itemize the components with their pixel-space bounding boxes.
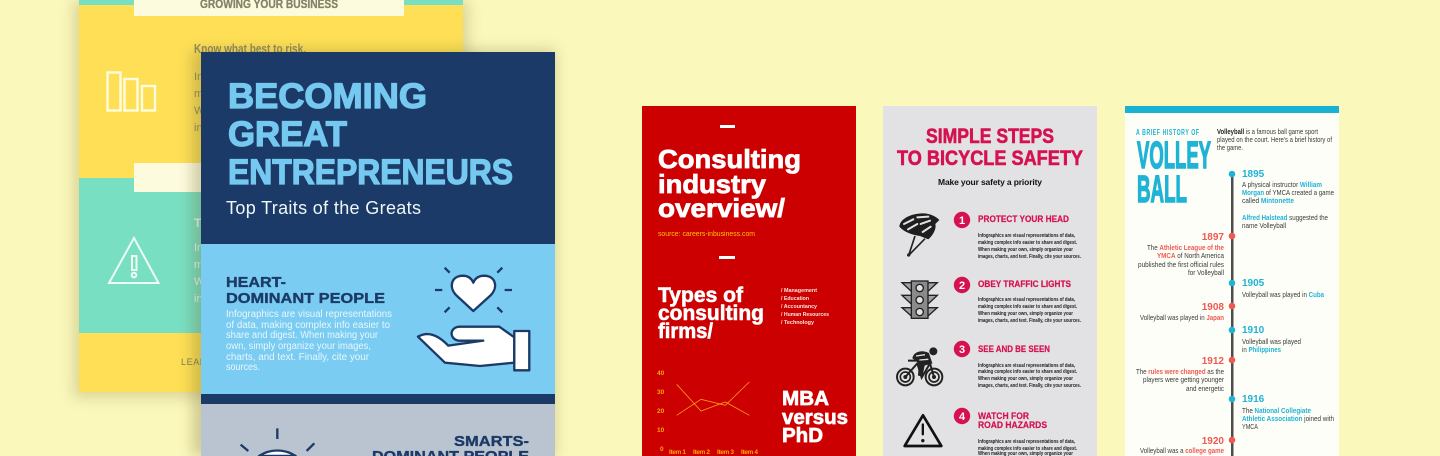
step text: Infographics are visual representations of data,: [978, 297, 1076, 303]
heading: mba versus phd: PhD: [782, 424, 823, 447]
text block: teal section: m: [194, 259, 203, 271]
step heading: ROAD HAZARDS: [978, 420, 1047, 431]
event 1905: 1905: [1242, 278, 1265, 289]
step text: images, charts, and text. Finally, cite your sources.: [978, 254, 1082, 260]
title: consulting industry overview: industry: [658, 169, 767, 199]
number badge 4: [954, 408, 970, 424]
step text: images, charts, and text. Finally, cite your sources.: [978, 383, 1082, 389]
title: simple steps to bicycle safety: SIMPLE STEPS: [926, 125, 1054, 148]
text block: risk section: [194, 41, 306, 134]
icon: warning triangle: [109, 238, 158, 283]
event 1910: Volleyball was played: [1242, 337, 1301, 346]
panel: becoming great entrepreneurs: [192, 50, 555, 456]
step heading: SEE AND BE SEEN: [978, 344, 1050, 355]
text block: introduction: the game.: [1217, 143, 1243, 152]
step text: [978, 439, 1078, 456]
step heading: [978, 411, 1047, 431]
list: firm types: [781, 288, 829, 326]
event 1916: The National Collegiate: [1242, 406, 1311, 415]
heading: heart-dominant people: [226, 274, 385, 307]
event 1910: [1229, 325, 1301, 354]
event 1912: The rules were changed as the: [1136, 367, 1224, 376]
event 1895: [1229, 169, 1334, 230]
text block: heart description: Infographics are visual representations: [226, 309, 392, 320]
section: smarts-dominant people: [201, 404, 555, 456]
icon: road hazard triangle: [905, 415, 941, 446]
event 1895: 1895: [1242, 169, 1265, 180]
title: a brief history of volleyball: BALL: [1137, 169, 1187, 211]
divider dash middle: [719, 256, 735, 259]
chart axis labels: [657, 370, 758, 456]
event 1916: Athletic Association joined with: [1242, 414, 1334, 423]
text block: risk section: Know what best to risk.: [194, 41, 306, 56]
event 1920: [1140, 436, 1235, 455]
event 1916: YMCA: [1242, 422, 1258, 431]
text block: risk section: in: [194, 122, 203, 134]
step text: When making your own, simply organize your: [978, 311, 1073, 317]
panel: yellow and teal business infographic: [73, 0, 469, 398]
event 1916: [1229, 394, 1334, 431]
text block: introduction: [1217, 127, 1333, 152]
source line: source: careers-inbusiness.com: [658, 229, 755, 238]
text block: teal section: [194, 216, 205, 305]
heading: heart-dominant people: DOMINANT PEOPLE: [226, 290, 385, 307]
step text: making complex info easier to share and digest.: [978, 369, 1078, 375]
number badge 3: [954, 341, 970, 357]
chart axis labels: 0: [660, 446, 664, 453]
step 3: [897, 341, 1082, 389]
event 1910: in Philippines: [1242, 345, 1281, 354]
chart axis labels: 10: [657, 427, 665, 434]
divider band: [201, 394, 555, 404]
step text: When making your own, simply organize your: [978, 247, 1073, 253]
event 1908: [1140, 302, 1235, 322]
text: learn more footer: LEAR: [181, 357, 207, 367]
event 1905: Volleyball was played in Cuba: [1242, 290, 1325, 299]
text block: introduction: Volleyball is a famous ball game sport: [1217, 127, 1319, 136]
title: [228, 77, 513, 192]
event 1895: A physical instructor William: [1242, 180, 1322, 189]
text block: heart description: own, simply organize your images,: [226, 341, 371, 352]
number badge 2: 2: [959, 280, 965, 292]
heading: types of consulting firms: [658, 284, 764, 343]
panel: volleyball history timeline: VOLLEY: [1137, 135, 1211, 177]
title: consulting industry overview: Consulting: [658, 144, 801, 174]
title: consulting industry overview: overview/: [658, 193, 785, 223]
step text: Infographics are visual representations of data,: [978, 439, 1076, 445]
step text: [978, 297, 1082, 324]
subtitle: Top Traits of the Greats: [226, 198, 421, 218]
chart axis labels: 30: [657, 389, 665, 396]
chart axis labels: 40: [657, 370, 665, 377]
text block: heart description: of data, making complex info easier to: [226, 320, 390, 331]
banner: growing your business: [134, 0, 404, 16]
chart axis labels: Item 3: [717, 449, 734, 456]
text block: heart description: [226, 309, 392, 373]
text block: heart description: sources.: [226, 362, 260, 373]
panel: volleyball history timeline: [1125, 106, 1339, 456]
heading: mba versus phd: versus: [782, 406, 848, 429]
text block: risk section: m: [194, 88, 203, 100]
step heading: PROTECT YOUR HEAD: [978, 214, 1069, 225]
step heading: WATCH FOR: [978, 411, 1029, 422]
text block: risk section: W: [194, 105, 205, 117]
title: consulting industry overview: [658, 144, 801, 223]
subtitle: Make your safety a priority: [938, 177, 1042, 187]
icon: traffic light: [902, 281, 937, 318]
icon: cyclist: [897, 348, 942, 385]
event 1912: and energetic: [1186, 384, 1224, 393]
event 1908: 1908: [1202, 302, 1224, 313]
section: heart-dominant people: [201, 244, 555, 394]
divider dash top: [720, 125, 735, 128]
event 1912: 1912: [1202, 356, 1224, 367]
number badge 1: 1: [959, 215, 965, 227]
chart axis labels: 20: [657, 408, 665, 415]
event 1895: name Volleyball: [1242, 221, 1286, 230]
icon: bar chart: [108, 72, 155, 110]
chart lines: [677, 382, 749, 415]
number badge 1: [954, 212, 970, 228]
step text: When making your own, simply organize your: [978, 376, 1073, 382]
list: firm types: / Management: [781, 288, 817, 294]
event 1897: [1138, 232, 1235, 277]
event 1912: [1136, 356, 1235, 393]
title: simple steps to bicycle safety: [897, 125, 1083, 170]
event 1895: Morgan of YMCA created a game: [1242, 188, 1334, 197]
event 1905: [1229, 278, 1325, 299]
number badge 2: [954, 277, 970, 293]
list: firm types: / Accountancy: [781, 304, 818, 310]
step text: making complex info easier to share and digest.: [978, 240, 1078, 246]
text block: introduction: played on the court. Here's a brief history of: [1217, 135, 1333, 144]
event 1912: players were getting younger: [1143, 375, 1224, 384]
text block: teal section: W: [194, 276, 205, 288]
event 1897: for Volleyball: [1188, 268, 1224, 277]
panel: bicycle safety: [883, 106, 1097, 456]
event 1897: YMCA of North America: [1157, 251, 1225, 260]
icon: helmet: [899, 213, 939, 257]
title: simple steps to bicycle safety: TO BICYCLE SAFETY: [897, 147, 1083, 170]
step text: [978, 233, 1082, 260]
event 1920: 1920: [1202, 436, 1224, 447]
event 1897: published the first official rules: [1138, 260, 1224, 269]
chart axis labels: Item 2: [693, 449, 710, 456]
step text: making complex info easier to share and digest.: [978, 446, 1078, 452]
chart axis labels: Item 4: [741, 449, 758, 456]
text block: risk section: In: [194, 71, 203, 83]
step text: Infographics are visual representations of data,: [978, 233, 1076, 239]
step 1: [899, 212, 1082, 260]
heading: types of consulting firms: firms/: [658, 320, 713, 343]
step 2: [902, 277, 1082, 324]
list: firm types: / Education: [781, 296, 810, 302]
event 1910: 1910: [1242, 325, 1265, 336]
event 1895: Alfred Halstead suggested the: [1242, 213, 1328, 222]
step text: images, charts, and text. Finally, cite your sources.: [978, 318, 1082, 324]
heading: types of consulting firms: consulting: [658, 302, 764, 325]
step text: [978, 363, 1082, 389]
step text: Infographics are visual representations of data,: [978, 363, 1076, 369]
list: firm types: / Human Resources: [781, 312, 829, 318]
event 1895: called Mintonette: [1242, 196, 1294, 205]
title: GREAT: [228, 115, 347, 154]
title: a brief history of volleyball: A BRIEF HISTORY OF: [1136, 129, 1199, 137]
heading: smarts-dominant people: SMARTS-: [454, 433, 529, 450]
number badge 4: 4: [959, 411, 966, 423]
heading: types of consulting firms: Types of: [658, 284, 744, 307]
heading: mba versus phd: [782, 387, 848, 447]
text block: heart description: charts, and text. Finally, cite your: [226, 352, 370, 363]
text block: teal section: T: [194, 216, 202, 230]
heading: heart-dominant people: HEART-: [226, 274, 286, 291]
text block: teal section: in: [194, 293, 203, 305]
event 1897: 1897: [1202, 232, 1224, 243]
step text: making complex info easier to share and digest.: [978, 304, 1078, 310]
text block: teal section: In: [194, 242, 203, 254]
heading: smarts-dominant people: [372, 433, 529, 456]
heading: mba versus phd: MBA: [782, 387, 829, 410]
event 1916: 1916: [1242, 394, 1265, 405]
text block: heart description: share and digest. When making your: [226, 330, 379, 341]
title: ENTREPRENEURS: [228, 153, 513, 192]
title: a brief history of volleyball: [1136, 129, 1211, 211]
icon: heart over open hand: [418, 268, 529, 370]
event 1897: The Athletic League of the: [1147, 243, 1224, 252]
event 1908: Volleyball was played in Japan: [1140, 313, 1224, 322]
number badge 3: 3: [959, 344, 965, 356]
title: BECOMING: [228, 77, 427, 116]
banner: blank second section: [134, 163, 404, 192]
list: firm types: / Technology: [781, 320, 815, 326]
line chart: [657, 370, 758, 456]
event 1920: Volleyball was a college game: [1140, 446, 1224, 455]
timeline axis: [1231, 174, 1234, 456]
step heading: OBEY TRAFFIC LIGHTS: [978, 279, 1071, 290]
step 4: [905, 408, 1078, 456]
icon: light bulb: [241, 428, 314, 456]
panel: consulting industry overview: [642, 106, 856, 456]
chart axis labels: Item 1: [669, 449, 686, 456]
